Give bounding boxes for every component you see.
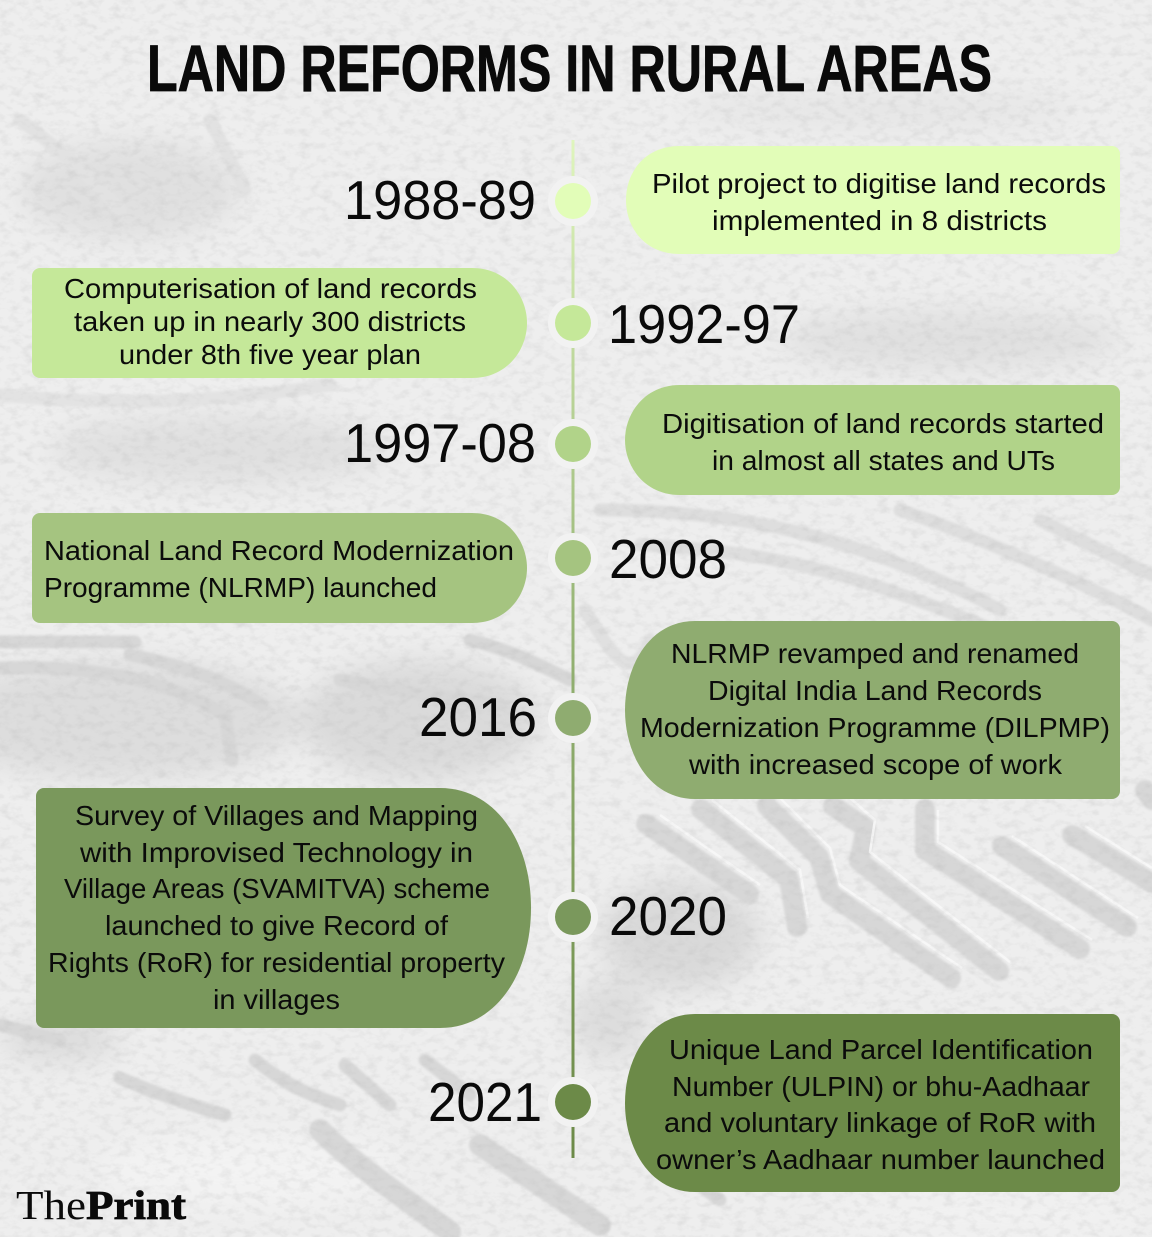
year label: 1988-89: 1988-89 — [344, 169, 536, 231]
panel: SVAMITVA: launched to give Record of — [105, 910, 448, 941]
panel: ULPIN: Unique Land Parcel Identification — [669, 1034, 1093, 1065]
panel: digitisation: in almost all states and UTs — [712, 445, 1055, 476]
timeline entry: 1997-08 — [344, 385, 1120, 495]
marker: 1992-97 — [548, 298, 598, 348]
panel: digitisation: Digitisation of land records started — [662, 408, 1104, 439]
panel: computerisation — [32, 268, 527, 378]
panel: SVAMITVA: with Improvised Technology in — [79, 837, 473, 868]
year label: 2021: 2021 — [428, 1071, 542, 1133]
panel: SVAMITVA: Village Areas (SVAMITVA) scheme — [64, 873, 490, 904]
panel: SVAMITVA: Survey of Villages and Mapping — [75, 800, 478, 831]
timeline entry: 2020 — [36, 788, 727, 1028]
marker: 2008 — [548, 533, 598, 583]
year label: 2008: 2008 — [609, 528, 727, 590]
timeline entry: 1992-97 — [32, 268, 800, 378]
panel: SVAMITVA: Rights (RoR) for residential property — [48, 947, 505, 978]
panel: pilot project — [626, 146, 1120, 254]
timeline entry: 2008 — [32, 513, 727, 623]
panel: SVAMITVA — [36, 788, 531, 1028]
panel: computerisation: taken up in nearly 300 districts — [74, 306, 466, 337]
panel: DILRMP: with increased scope of work — [688, 749, 1063, 780]
panel: ULPIN: and voluntary linkage of RoR with — [664, 1107, 1096, 1138]
panel: computerisation: Computerisation of land records — [64, 273, 477, 304]
panel: computerisation: under 8th five year plan — [119, 339, 421, 370]
panel: SVAMITVA: in villages — [213, 984, 340, 1015]
year label: 1992-97: 1992-97 — [608, 293, 800, 355]
panel: ULPIN: Number (ULPIN) or bhu-Aadhaar — [672, 1071, 1090, 1102]
panel: pilot project: implemented in 8 districts — [712, 205, 1047, 236]
panel: DILRMP — [625, 621, 1120, 799]
logo: ThePrint: ThePrint — [16, 1182, 186, 1228]
panel: NLRMP launch: Programme (NLRMP) launched — [44, 572, 437, 603]
marker: 2021 — [548, 1077, 598, 1127]
panel: ULPIN — [625, 1014, 1120, 1192]
year label: 2016: 2016 — [419, 686, 537, 748]
panel: pilot project: Pilot project to digitise land records — [652, 168, 1106, 199]
year label: 1997-08: 1997-08 — [344, 412, 536, 474]
marker: 2020 — [548, 892, 598, 942]
panel: NLRMP launch: National Land Record Modernization — [44, 535, 514, 566]
timeline axis — [572, 140, 574, 1158]
year label: 2020: 2020 — [609, 885, 727, 947]
timeline entry: 2021 — [428, 1014, 1120, 1192]
panel: NLRMP launch — [32, 513, 527, 623]
panel: DILRMP: NLRMP revamped and renamed — [671, 638, 1079, 669]
timeline entry: 1988-89 — [344, 146, 1120, 254]
marker: 1997-08 — [548, 419, 598, 469]
panel: DILRMP: Digital India Land Records — [708, 675, 1042, 706]
panel: ULPIN: owner’s Aadhaar number launched — [656, 1144, 1105, 1175]
timeline entry: 2016 — [419, 621, 1120, 799]
marker: 2016 — [548, 693, 598, 743]
panel: digitisation — [625, 385, 1120, 495]
panel: DILRMP: Modernization Programme (DILPMP) — [640, 712, 1110, 743]
marker: 1988-89 — [548, 176, 598, 226]
